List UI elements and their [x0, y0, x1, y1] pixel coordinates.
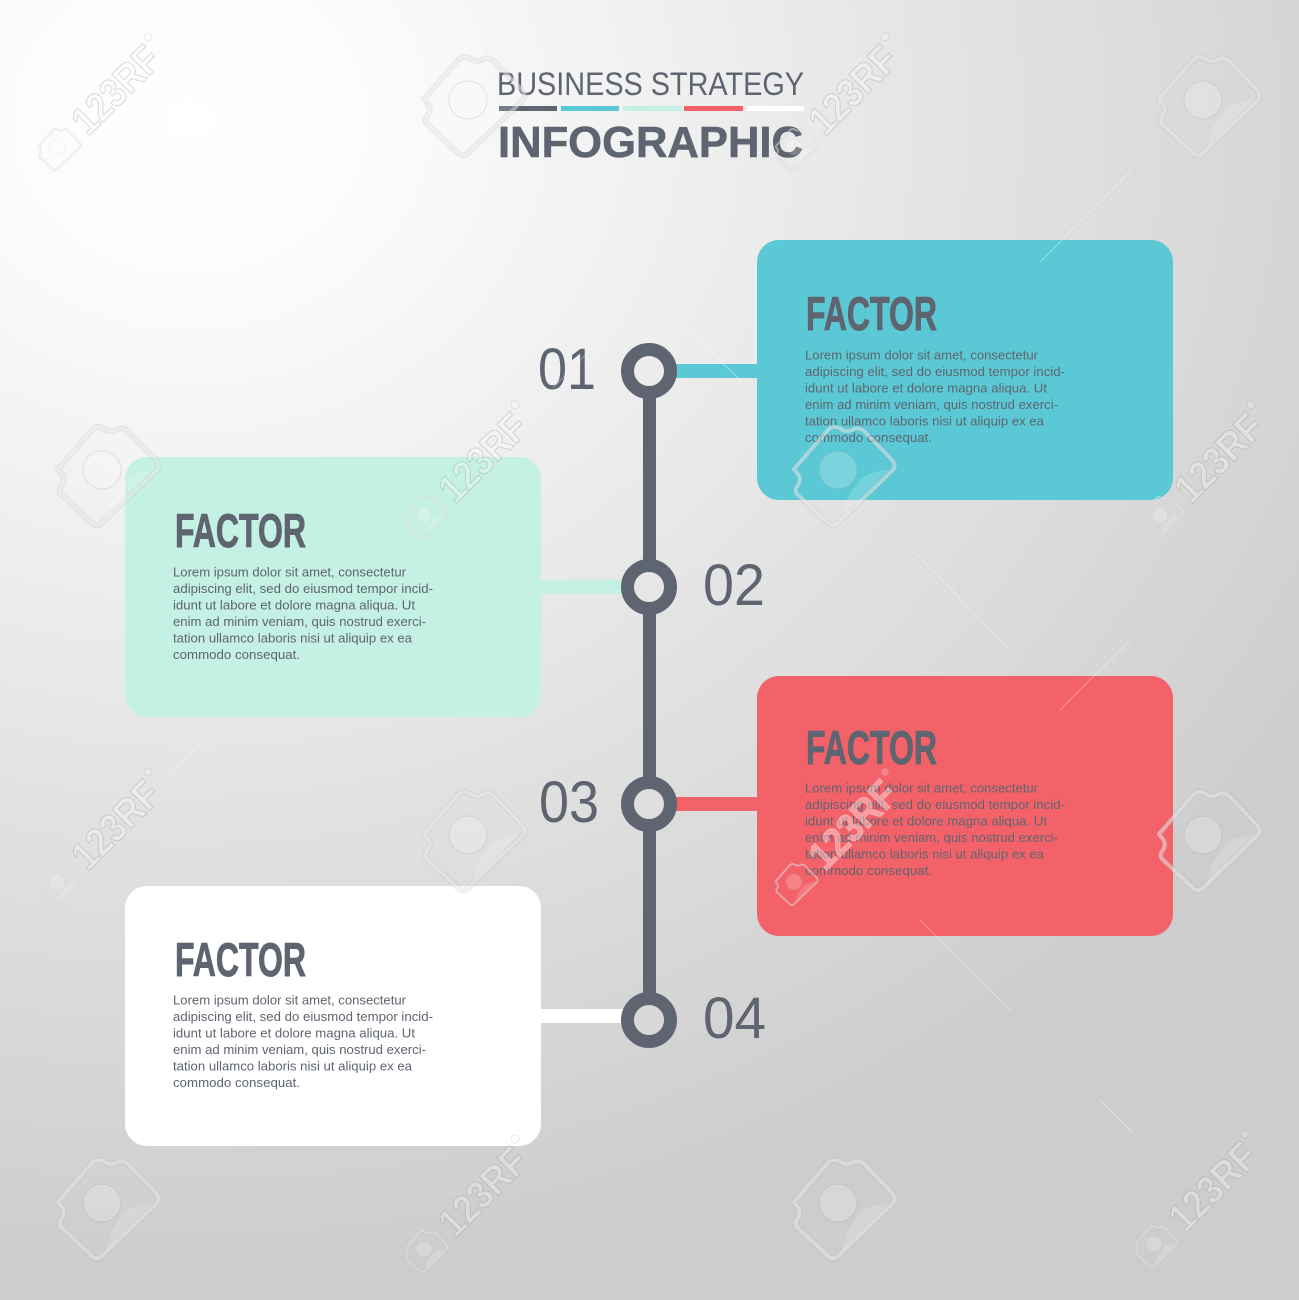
number 02: 02: [703, 553, 765, 618]
body text: idunt ut labore et dolore magna aliqua. Ut: [805, 380, 1047, 396]
watermark: 123RF logos: 123RF: [800, 772, 906, 878]
body text: [173, 564, 433, 662]
body text: [805, 780, 1065, 878]
number 03: 03: [539, 770, 599, 835]
body text: adipiscing elit, sed do eiusmod tempor incid-: [173, 581, 433, 596]
body text: tation ullamco laboris nisi ut aliquip ex ea: [805, 846, 1045, 862]
panel: factor 04: [125, 886, 541, 1146]
body text: commodo consequat.: [173, 647, 300, 662]
node 02: [628, 566, 670, 608]
heading: FACTOR: [806, 721, 937, 774]
node 01: [628, 350, 670, 392]
watermark: 123RF logos: 123RF: [1166, 405, 1272, 511]
body text: commodo consequat.: [805, 863, 932, 878]
panel: factor 02: [125, 457, 541, 717]
connector 03: [670, 797, 760, 811]
body text: tation ullamco laboris nisi ut aliquip ex ea: [805, 414, 1045, 428]
body text: Lorem ipsum dolor sit amet, consectetur: [173, 992, 407, 1008]
title line: infographic: INFOGRAPHIC: [498, 118, 803, 167]
connector 04: [538, 1009, 630, 1023]
node 03: [628, 782, 670, 826]
body text: Lorem ipsum dolor sit amet, consectetur: [173, 564, 407, 580]
body text: idunt ut labore et dolore magna aliqua. Ut: [805, 814, 1047, 828]
body text: adipiscing elit, sed do eiusmod tempor incid-: [805, 797, 1065, 812]
watermark: 123RF logos: 123RF: [1160, 1134, 1266, 1240]
node 04: [628, 998, 670, 1042]
body text: Lorem ipsum dolor sit amet, consectetur: [805, 348, 1039, 362]
body text: idunt ut labore et dolore magna aliqua. Ut: [173, 598, 415, 612]
body text: enim ad minim veniam, quis nostrud exerci-: [173, 1042, 426, 1057]
watermark: 123RF logos: 123RF: [63, 772, 169, 878]
number 04: 04: [703, 986, 766, 1051]
timeline spine: [643, 371, 656, 1020]
number 01: 01: [538, 337, 596, 402]
watermark: 123RF logos: 123RF: [430, 405, 536, 511]
body text: tation ullamco laboris nisi ut aliquip ex ea: [173, 1058, 413, 1074]
connector 01: [670, 364, 760, 378]
panel: factor 03: [757, 676, 1173, 936]
body text: Lorem ipsum dolor sit amet, consectetur: [805, 780, 1039, 796]
watermark: 123RF logos: 123RF: [430, 1139, 536, 1245]
body text: enim ad minim veniam, quis nostrud exerci-: [173, 614, 426, 629]
body text: adipiscing elit, sed do eiusmod tempor incid-: [173, 1009, 433, 1024]
body text: enim ad minim veniam, quis nostrud exerci-: [805, 830, 1058, 845]
panel: factor 01: [757, 240, 1173, 500]
body text: commodo consequat.: [173, 1075, 300, 1090]
body text: idunt ut labore et dolore magna aliqua. Ut: [173, 1026, 415, 1040]
heading: FACTOR: [175, 504, 306, 557]
body text: adipiscing elit, sed do eiusmod tempor incid-: [805, 364, 1065, 379]
connector 02: [538, 580, 630, 594]
heading: FACTOR: [175, 933, 306, 986]
watermark: 123RF logos: 123RF: [63, 37, 169, 143]
watermark: 123RF logos: 123RF: [800, 37, 906, 143]
title: [497, 66, 804, 167]
body text: [173, 992, 433, 1090]
body text: tation ullamco laboris nisi ut aliquip ex ea: [173, 630, 413, 646]
title line: business strategy: BUSINESS STRATEGY: [497, 66, 804, 102]
body text: commodo consequat.: [805, 430, 932, 445]
heading: FACTOR: [806, 287, 937, 340]
body text: enim ad minim veniam, quis nostrud exerci-: [805, 397, 1058, 412]
body text: [805, 348, 1065, 445]
colour bar strip: [499, 106, 804, 111]
